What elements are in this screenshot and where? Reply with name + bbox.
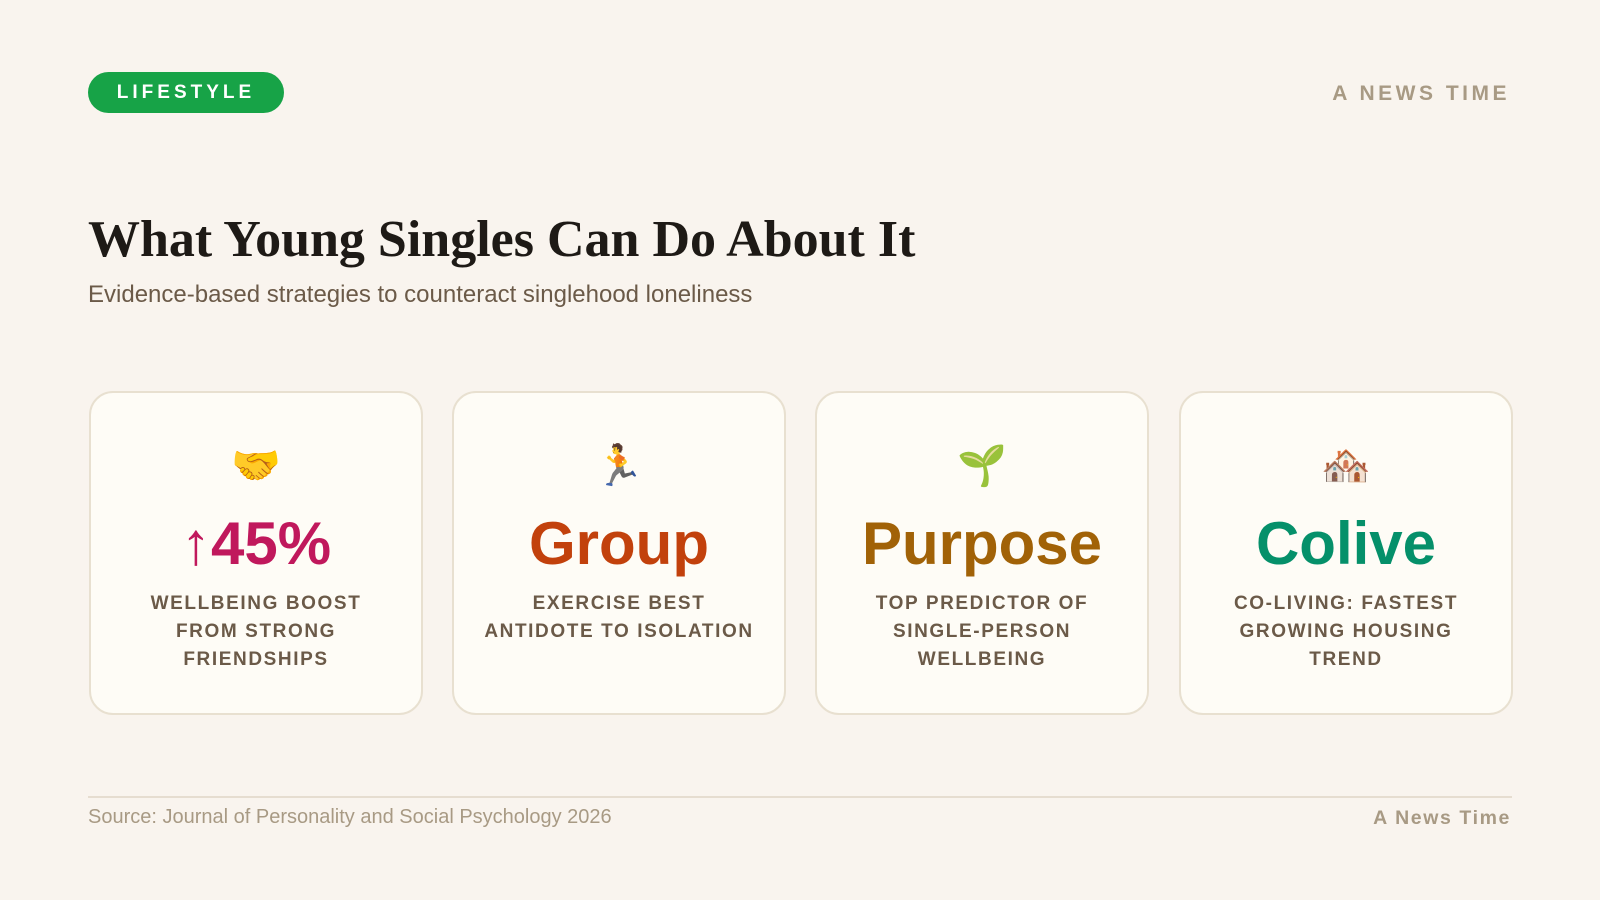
stat: Colive [1256,510,1436,577]
brand: A NEWS TIME [1332,82,1510,105]
label: CO-LIVING: FASTEST GROWING HOUSING TREND [1234,593,1458,670]
title: What Young Singles Can Do About It [88,211,915,268]
card: colive [1179,391,1513,715]
card: friendships [89,391,423,715]
icon: houses: 🏘️ [1321,442,1371,489]
label: WELLBEING BOOST FROM STRONG FRIENDSHIPS [151,593,361,670]
label: EXERCISE BEST ANTIDOTE TO ISOLATION [484,593,754,642]
source: Source: Journal of Personality and Social Psychology 2026 [88,806,612,828]
icon: handshake: 🤝 [231,442,281,489]
card: purpose [815,391,1149,715]
label: TOP PREDICTOR OF SINGLE-PERSON WELLBEING [876,593,1088,670]
icon: runner: 🏃 [594,442,644,489]
subtitle: Evidence-based strategies to counteract singlehood loneliness [88,281,752,308]
stat: ↑45% [181,510,331,577]
stat: Group [529,510,709,577]
tag pill [88,72,284,113]
icon: seedling: 🌱 [957,442,1007,489]
stat: Purpose [862,510,1102,577]
footer brand: A News Time [1373,807,1511,829]
card: exercise [452,391,786,715]
tag pill: LIFESTYLE [117,82,255,103]
